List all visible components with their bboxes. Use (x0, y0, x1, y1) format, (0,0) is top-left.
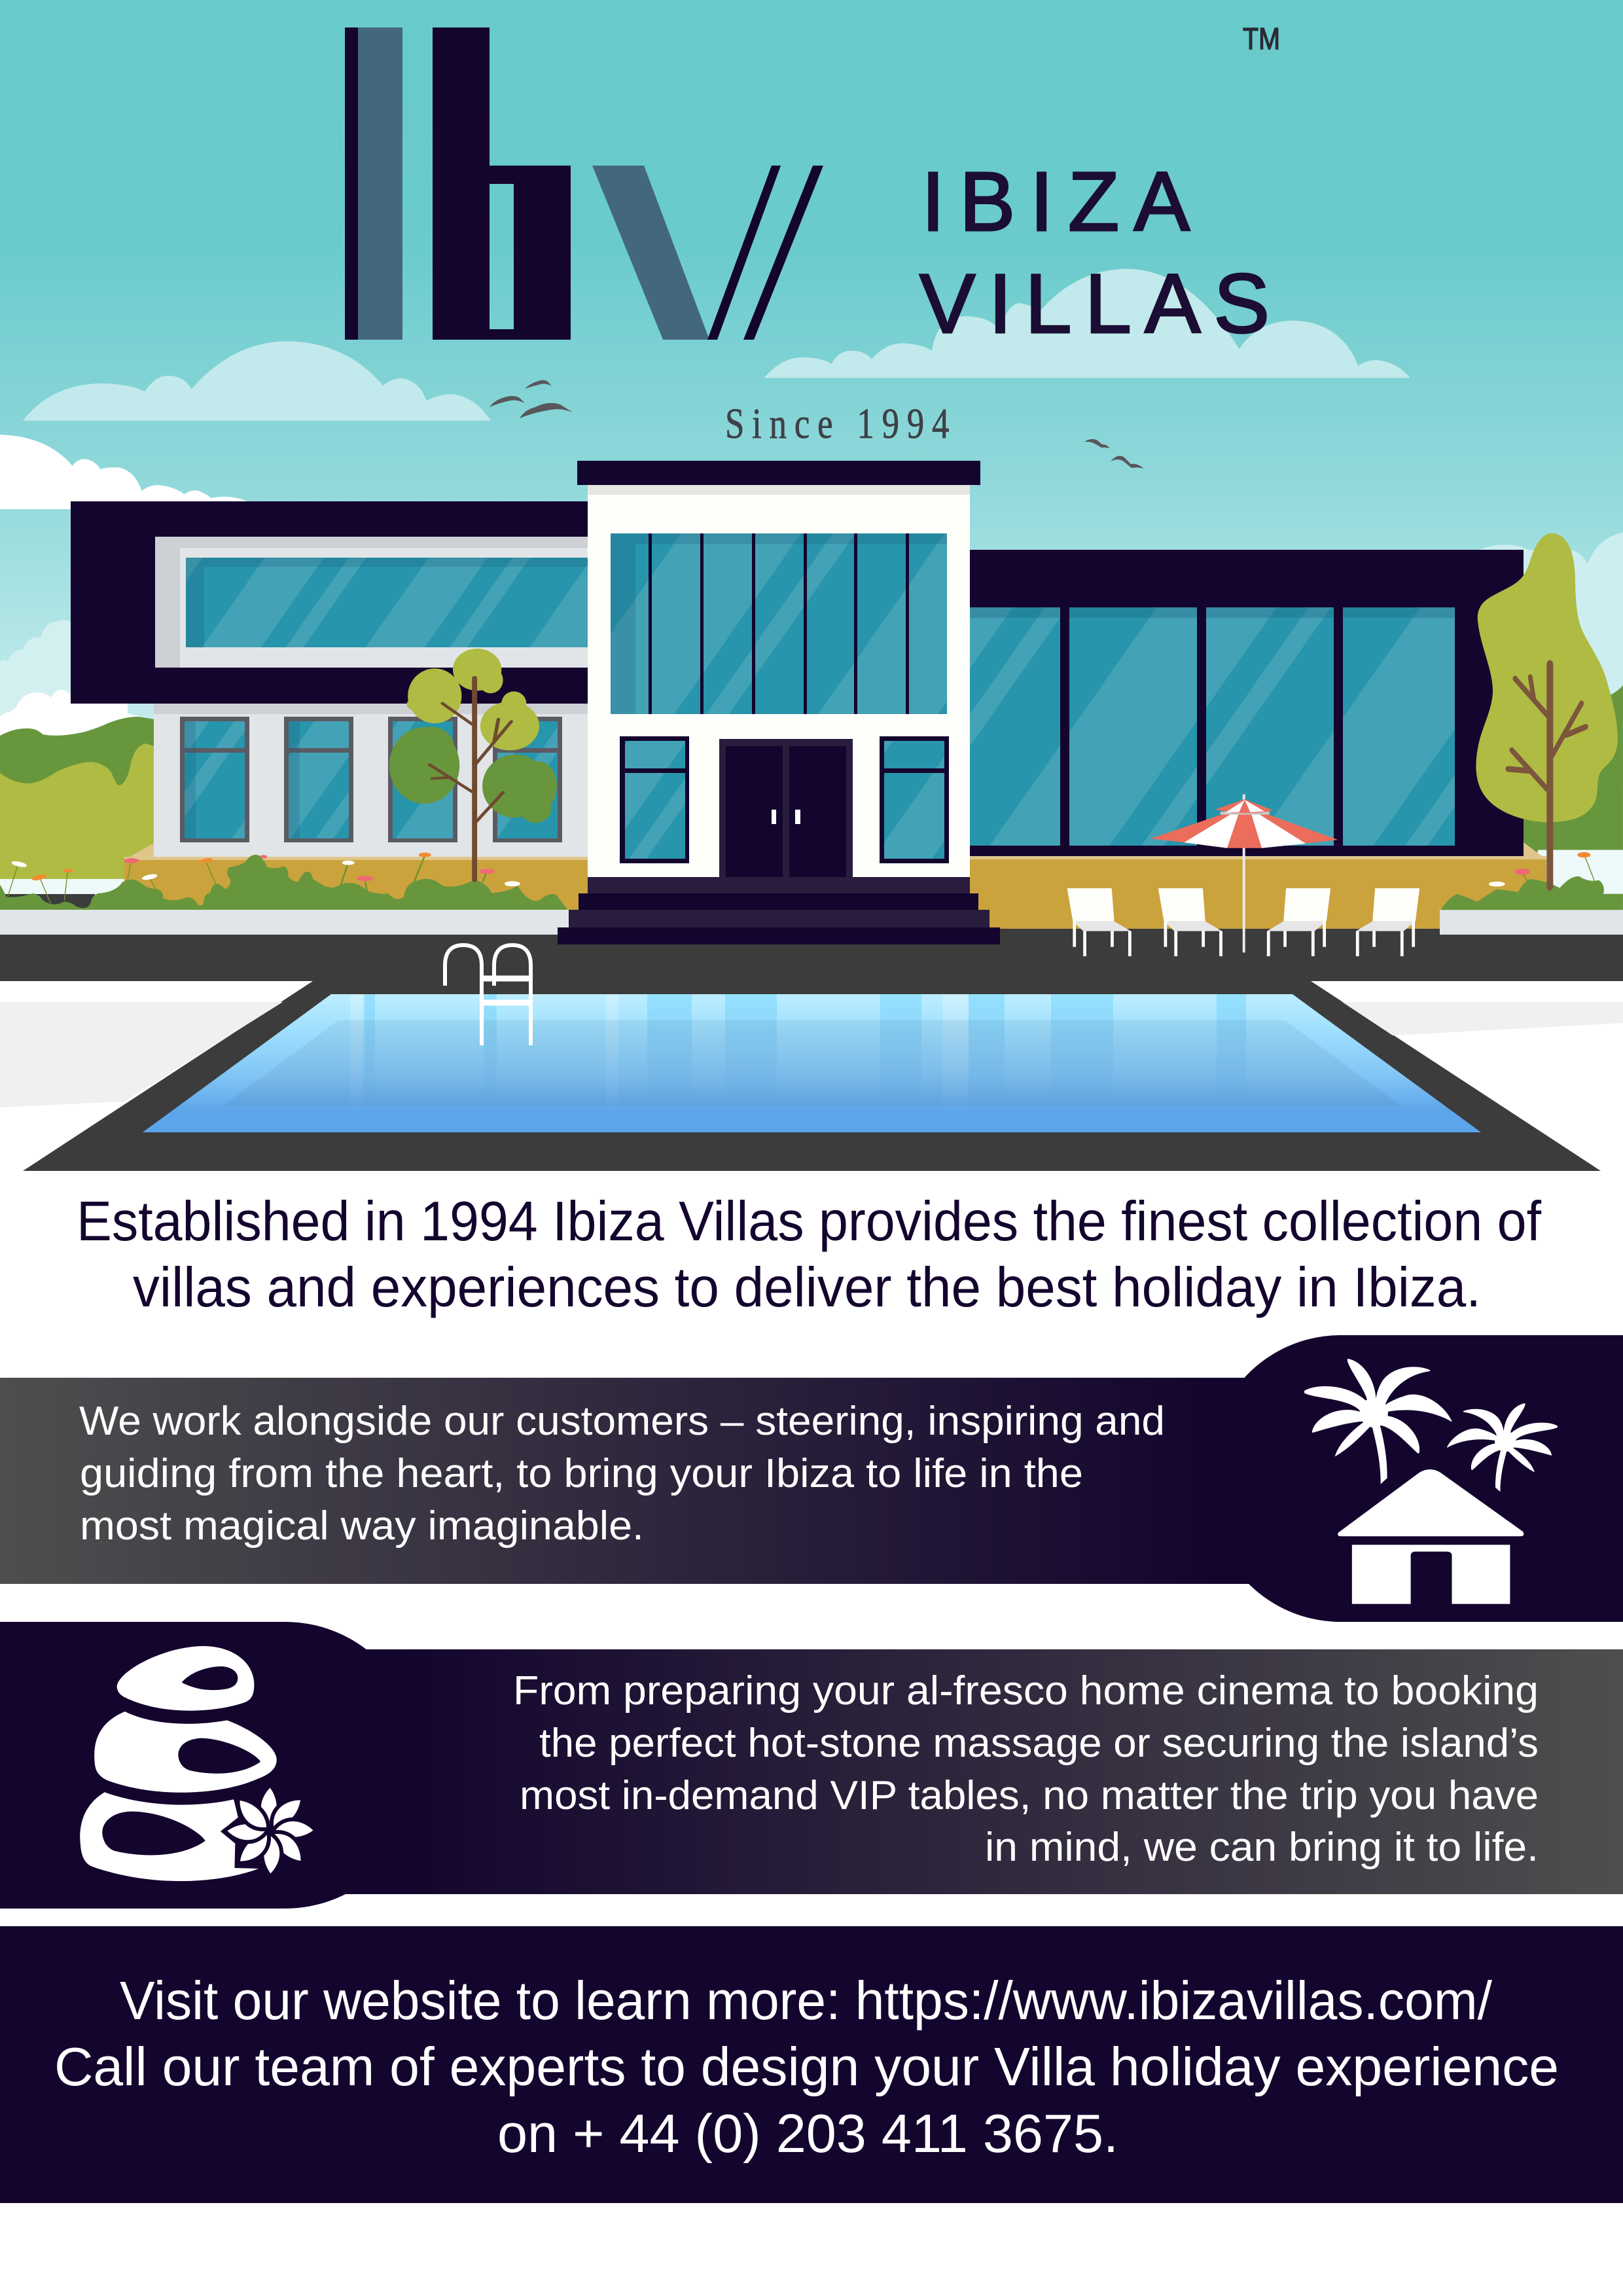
intro line 2: villas and experiences to deliver the best holiday in Ibiza. (133, 1257, 1481, 1319)
background: left pale cloud (0, 620, 71, 720)
text line 2: guiding from the heart, to bring your Ibiza to life in the (80, 1451, 1083, 1496)
large glass (611, 533, 947, 714)
chair 2 (1158, 888, 1222, 956)
right bushes (1441, 852, 1623, 910)
intro line 1: Established in 1994 Ibiza Villas provides the finest collection of (77, 1191, 1541, 1253)
roof cap (577, 461, 980, 485)
panel text (513, 1668, 1539, 1870)
flower (224, 1785, 316, 1876)
cloud: white left (0, 435, 247, 509)
birds: left flock (490, 380, 573, 418)
pool ladder (445, 945, 531, 1045)
bottom stone (80, 1792, 259, 1881)
background: left white cloud (0, 690, 154, 740)
panel bar (0, 1378, 1257, 1584)
glass panels (970, 607, 1455, 846)
recessed window surround (155, 537, 589, 668)
text line 3: most magical way imaginable. (80, 1503, 644, 1549)
logo (345, 22, 1280, 351)
footer line 2: Call our team of experts to design your Villa holiday experience (54, 2036, 1559, 2097)
pill background (0, 1622, 422, 1909)
background: left dark ground (0, 894, 95, 911)
left small window (620, 736, 689, 863)
top stone (117, 1646, 254, 1711)
text line 2: the perfect hot-stone massage or securing the island’s (539, 1721, 1539, 1766)
background: right scenery (1479, 533, 1623, 895)
flowers: middle garden (340, 853, 520, 893)
pavement right (1440, 910, 1623, 935)
panel: customers (0, 1335, 1623, 1622)
right pale strip (1538, 850, 1623, 895)
pavement left (0, 910, 569, 935)
logo wordmark line 2: VILLAS (919, 257, 1270, 351)
center block of villa (577, 461, 980, 878)
roof block (71, 501, 589, 704)
stairs (558, 877, 1000, 944)
logo wordmark line 1: IBIZA (921, 155, 1190, 249)
pool light stripes (350, 994, 1246, 1073)
right dark hill (1524, 685, 1623, 852)
big palm (1304, 1359, 1452, 1484)
door (719, 739, 853, 877)
house body (1352, 1545, 1510, 1604)
flowers: left garden (8, 855, 267, 904)
logo mark IBV (345, 27, 823, 340)
right small window (880, 736, 949, 863)
roof shade (588, 485, 970, 495)
chair 4 (1356, 888, 1419, 956)
terrace gold base (124, 842, 1546, 929)
pale terrace right (1342, 1002, 1623, 1035)
background sky (0, 0, 1623, 913)
house roof (1338, 1469, 1524, 1536)
small palm (1447, 1403, 1558, 1492)
left wing of villa (71, 501, 589, 857)
background: left lime hill (0, 744, 154, 880)
middle stone (94, 1712, 277, 1793)
panel: experiences (0, 1622, 1623, 1909)
intro text (77, 1191, 1541, 1319)
background: left pale strip (0, 879, 128, 895)
lounge chairs (1067, 888, 1419, 956)
background: left dark hill (0, 717, 154, 812)
panel text (79, 1399, 1165, 1549)
white facade (588, 485, 970, 878)
sun umbrella (1150, 795, 1338, 952)
cloud: behind logo wordmark (764, 269, 1410, 378)
text line 1: We work alongside our customers – steering, inspiring and (79, 1399, 1165, 1444)
icon: palm trees and house (1304, 1359, 1558, 1604)
ground and pool surround (0, 929, 1623, 1171)
swimming pool (143, 994, 1481, 1132)
footer line 3: on + 44 (0) 203 411 3675. (497, 2103, 1118, 2164)
pill background (1206, 1335, 1623, 1622)
bushes: middle (306, 872, 568, 910)
small tree (389, 649, 557, 880)
lime foliage (407, 649, 539, 751)
pool depth shading (223, 1020, 1401, 1106)
text line 3: most in-demand VIP tables, no matter the trip you have (520, 1773, 1539, 1818)
pale terrace left (0, 1002, 283, 1107)
bushes: left (0, 855, 327, 910)
text line 4: in mind, we can bring it to life. (985, 1825, 1539, 1870)
since 1994: Since 1994 (725, 399, 949, 447)
chair 1 (1067, 888, 1132, 956)
dark foliage (389, 726, 557, 823)
panel bar (327, 1649, 1623, 1894)
lower wall (154, 704, 589, 857)
ground floor windows (180, 717, 562, 842)
right tree (1476, 533, 1618, 887)
trunk and branches (429, 678, 511, 880)
footer line 1: Visit our website to learn more: https://www.ibizavillas.com/ (120, 1970, 1493, 2031)
chair 3 (1267, 888, 1330, 956)
birds: right flock (1084, 439, 1144, 469)
icon: stacked stones and flower (80, 1646, 316, 1881)
trademark: TM (1243, 22, 1280, 56)
footer panel: contact (0, 1926, 1623, 2203)
text line 1: From preparing your al-fresco home cinema to booking (513, 1668, 1539, 1713)
cloud: upper left (23, 341, 491, 421)
right wing of villa (969, 550, 1524, 856)
upper window glass (186, 558, 588, 647)
